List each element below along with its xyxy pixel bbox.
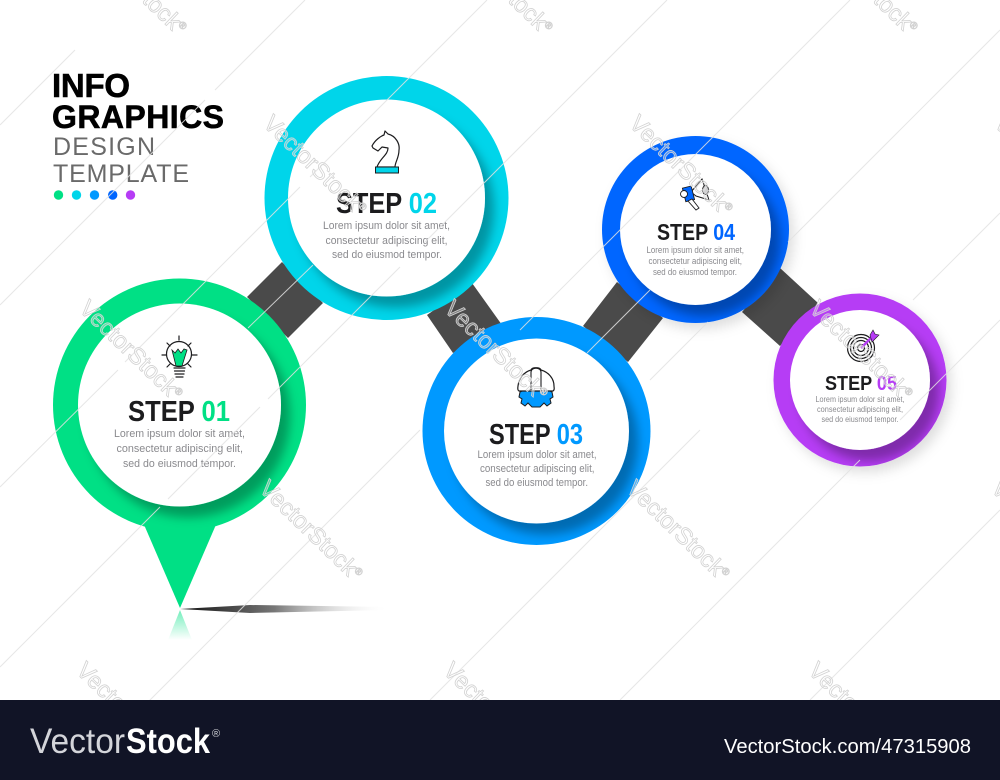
- body text: Lorem ipsum dolor sit amet,: [646, 245, 744, 255]
- body text: sed do eiusmod tempor.: [332, 249, 442, 261]
- heading: step 05: STEP 05: [825, 373, 897, 395]
- panel: step 3: [422, 317, 650, 545]
- body text: sed do eiusmod tempor.: [653, 267, 737, 277]
- panel: step 5: [774, 294, 946, 466]
- panel: step 4: [602, 136, 789, 323]
- connector: step 1 to step 2: [247, 262, 323, 338]
- footer url: VectorStock.com/47315908: [724, 736, 971, 758]
- icon: light bulb: [162, 336, 197, 377]
- pin ground shadow: [180, 605, 390, 613]
- watermark overlay text: ®: [902, 386, 915, 399]
- body text: Lorem ipsum dolor sit amet,: [323, 220, 450, 232]
- ring: [422, 317, 650, 545]
- heading: step 04: STEP 04: [657, 219, 735, 245]
- footer logo: [30, 722, 220, 761]
- title block: INFO: [52, 67, 130, 104]
- watermark overlay text: ®: [722, 201, 735, 214]
- footer logo: Vector: [30, 722, 125, 761]
- watermark overlay text: VectorStock: [439, 657, 547, 763]
- title block: GRAPHICS: [52, 99, 224, 135]
- legend dots: [54, 190, 135, 200]
- body text: consectetur adipiscing elit,: [817, 405, 903, 414]
- icon: megaphone: [680, 179, 709, 210]
- title block: DESIGN: [53, 133, 155, 161]
- inner shadow disc: [620, 154, 771, 305]
- ring: [53, 278, 306, 532]
- connector: step 2 to step 3: [427, 283, 502, 353]
- body text: [114, 428, 245, 470]
- body text: [816, 395, 904, 424]
- panel: step 2: [264, 76, 508, 320]
- watermark overlay text: ®: [536, 748, 549, 761]
- body text: [478, 449, 596, 489]
- inner shadow disc: [78, 304, 281, 506]
- connector: step 4 to step 5: [742, 268, 818, 346]
- heading: step 01: STEP 01: [128, 396, 230, 428]
- ring: [774, 294, 946, 466]
- watermark overlay text: VectorStock: [75, 295, 183, 401]
- ring: [602, 136, 789, 323]
- watermark overlay text: VectorStock: [255, 475, 363, 581]
- heading: step 02: STEP 02: [336, 188, 437, 220]
- watermark overlay text: ®: [719, 566, 732, 579]
- body text: [323, 220, 450, 261]
- heading: step 03: STEP 03: [489, 419, 583, 451]
- watermark overlay text: VectorStock: [625, 110, 733, 216]
- footer logo: Stock: [126, 722, 210, 761]
- watermark overlay text: ®: [542, 20, 555, 33]
- body text: [646, 245, 744, 277]
- icon: target with arrow: [848, 330, 879, 362]
- body text: sed do eiusmod tempor.: [822, 415, 898, 424]
- body text: consectetur adipiscing elit,: [480, 463, 594, 475]
- watermark overlay text: ®: [901, 748, 914, 761]
- ring: [264, 76, 508, 320]
- body text: consectetur adipiscing elit,: [116, 443, 243, 455]
- body text: sed do eiusmod tempor.: [486, 477, 588, 489]
- body text: consectetur adipiscing elit,: [326, 235, 448, 247]
- inner shadow disc: [790, 310, 930, 450]
- watermark overlay text: ®: [537, 386, 550, 399]
- watermark overlay text: ®: [176, 20, 189, 33]
- footer band: [0, 700, 1000, 780]
- title block: TEMPLATE: [53, 160, 189, 188]
- body text: Lorem ipsum dolor sit amet,: [114, 428, 245, 440]
- body text: sed do eiusmod tempor.: [123, 458, 236, 470]
- pin reflection: [168, 610, 192, 640]
- panel: step 1 map pin: [53, 278, 390, 640]
- inner shadow disc: [444, 338, 629, 524]
- watermark overlay text: VectorStock: [805, 295, 913, 401]
- icon: helmet and gear: [518, 368, 554, 407]
- watermark overlay text: ®: [172, 386, 185, 399]
- pin tip: [142, 520, 218, 608]
- body text: Lorem ipsum dolor sit amet,: [816, 395, 904, 404]
- icon: chess knight: [372, 131, 399, 173]
- connector: step 3 to step 4: [583, 282, 663, 362]
- watermark overlay text: ®: [907, 20, 920, 33]
- watermark overlay text: VectorStock: [440, 295, 548, 401]
- body text: Lorem ipsum dolor sit amet,: [478, 449, 596, 461]
- watermark overlay text: VectorStock: [259, 110, 367, 216]
- inner shadow disc: [288, 100, 485, 296]
- title block: [52, 67, 224, 188]
- watermark overlay text: VectorStock: [72, 657, 180, 763]
- watermark overlay text: VectorStock: [622, 475, 730, 581]
- watermark overlay text: ®: [169, 748, 182, 761]
- body text: consectetur adipiscing elit,: [648, 256, 742, 266]
- footer logo: ®: [212, 728, 220, 740]
- watermark overlay text: VectorStock: [804, 657, 912, 763]
- watermark overlay text: ®: [356, 201, 369, 214]
- watermark overlay text: ®: [352, 566, 365, 579]
